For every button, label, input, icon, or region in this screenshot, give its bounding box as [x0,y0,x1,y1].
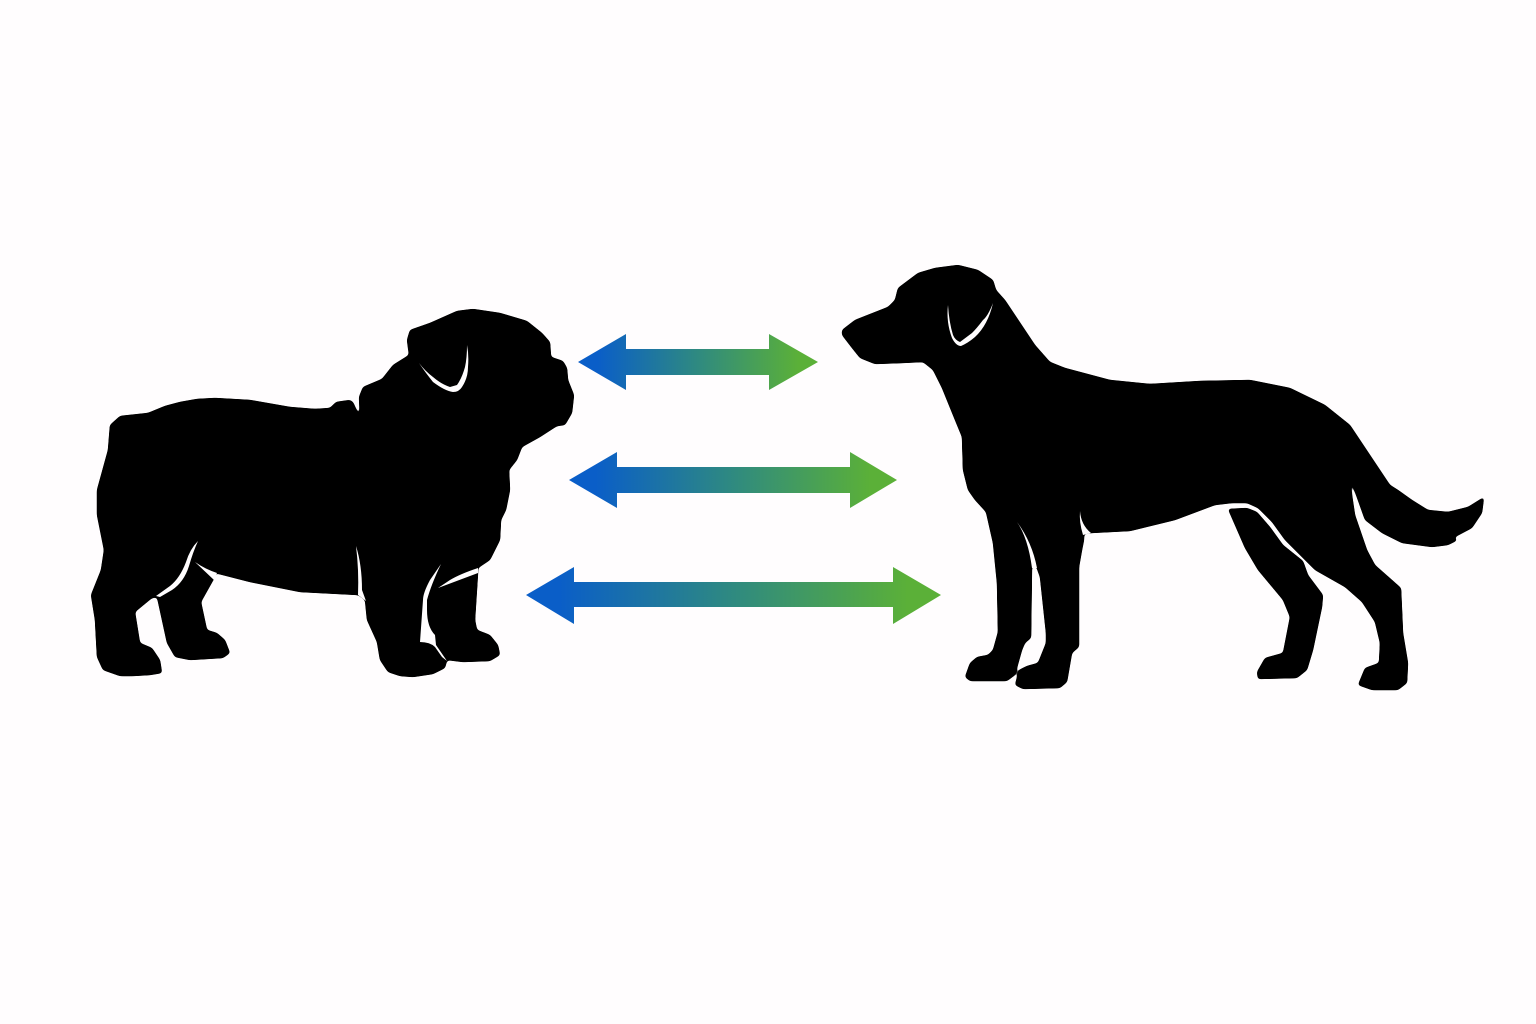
arrow: top double-headed [578,334,818,390]
bulldog front legs gap [420,564,447,661]
arrow: middle double-headed [569,452,897,508]
tall dog shoulder sliver [1017,522,1037,568]
icon: tall dog silhouette [842,265,1484,690]
icon: bulldog silhouette [91,309,574,677]
bulldog rear leg sliver [156,541,198,597]
bulldog ear highlight [419,345,468,392]
arrow: bottom double-headed [526,567,941,624]
tall dog near hind leg [1228,508,1323,679]
tall dog ear highlight [948,303,993,346]
bulldog chest wedge [438,568,478,588]
bulldog belly wedge [195,562,217,580]
tall dog belly notch [1080,511,1091,535]
bulldog belly to front leg sliver [356,546,366,601]
